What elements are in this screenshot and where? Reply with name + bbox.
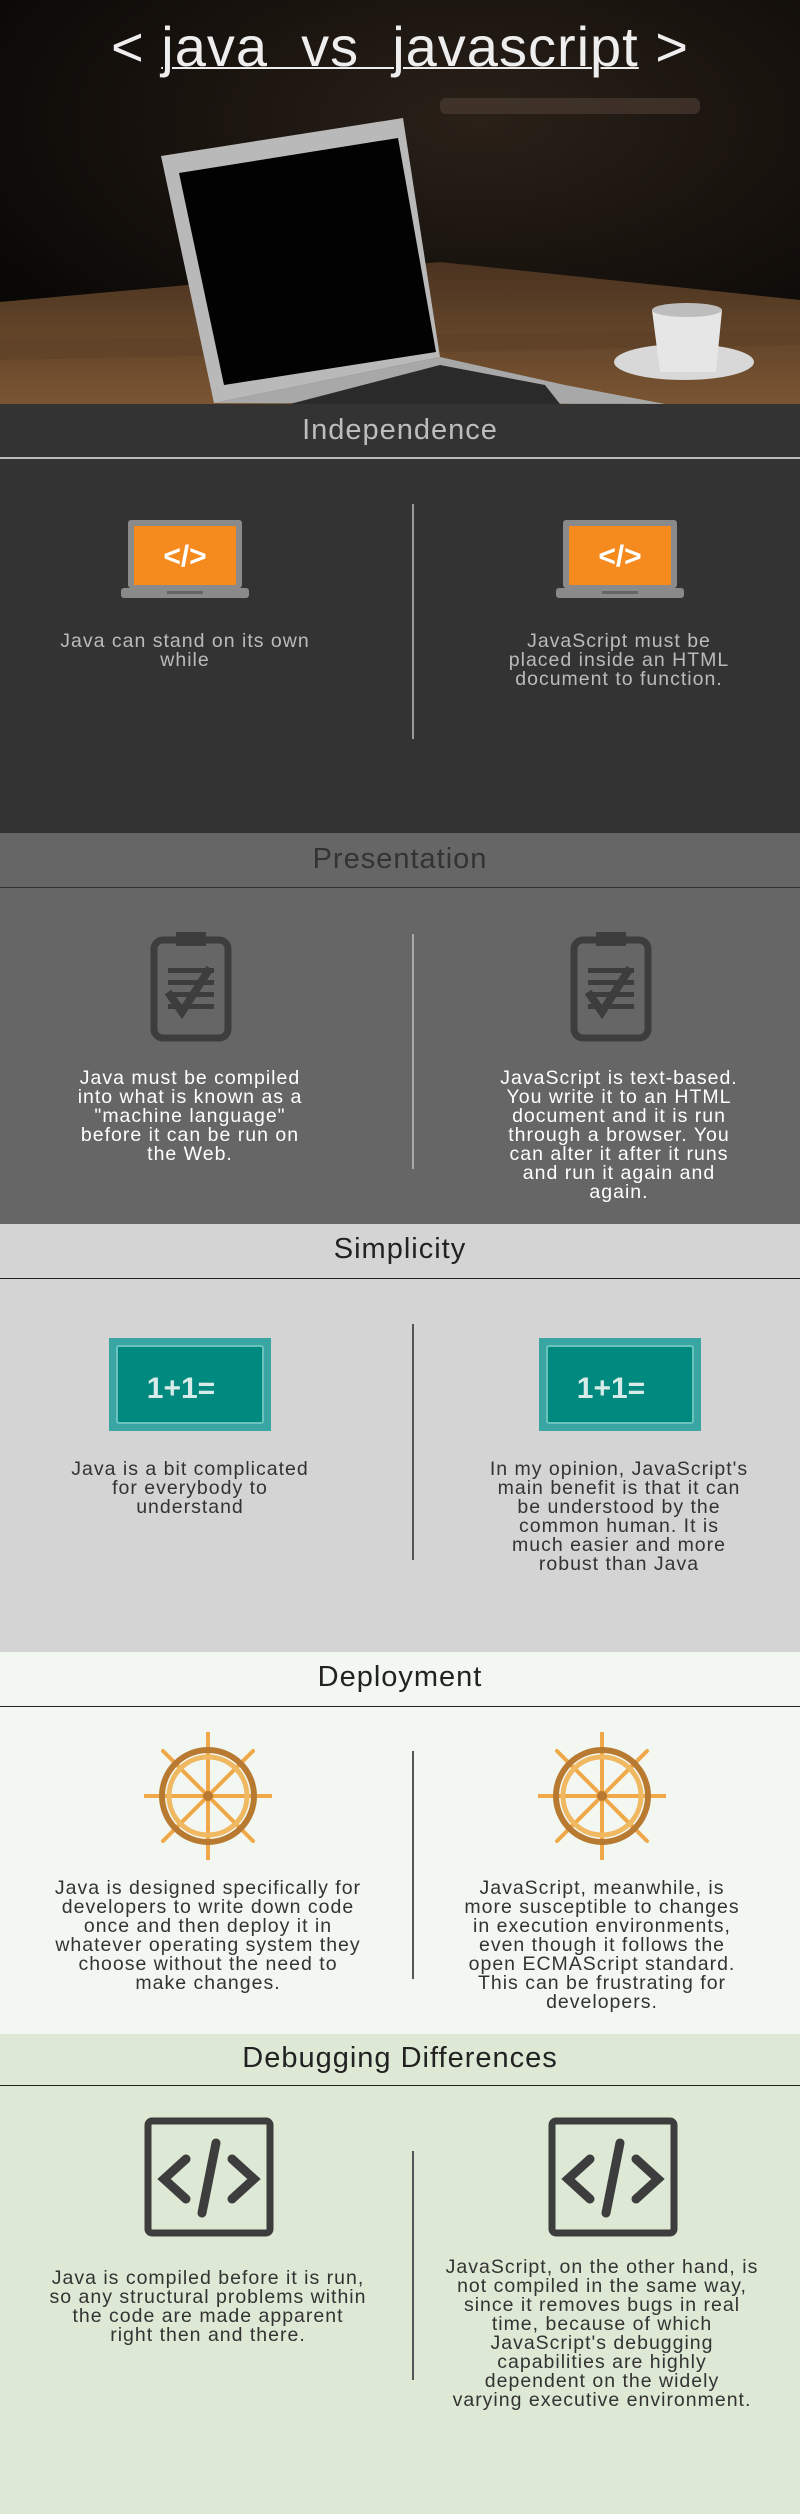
- icon: clipboard left: [150, 932, 232, 1042]
- text: javascript simplicity: robust than Java: [539, 1553, 699, 1575]
- icon: chalkboard right: 1+1=: [577, 1372, 645, 1405]
- text: javascript presentation: document and it is run: [512, 1105, 726, 1127]
- text: javascript debugging: JavaScript's debugging: [490, 2332, 714, 2354]
- text: javascript simplicity: In my opinion, JavaScript's: [490, 1458, 748, 1480]
- heading: Debugging Differences: Debugging Differences: [242, 2042, 558, 2074]
- text: javascript presentation: and run it again and: [523, 1162, 715, 1184]
- icon: ship wheel left: [144, 1732, 272, 1860]
- panel: independence: [0, 404, 800, 833]
- text: javascript deployment: in execution environments,: [473, 1915, 731, 1937]
- icon: chalkboard left: [109, 1338, 271, 1431]
- text: javascript debugging: [446, 2256, 758, 2411]
- icon: laptop code right: </>: [598, 540, 642, 573]
- text: javascript presentation: [500, 1067, 738, 1203]
- text: javascript debugging: capabilities are highly: [497, 2351, 707, 2373]
- panel: debugging differences: [0, 2034, 800, 2514]
- text: javascript debugging: JavaScript, on the other hand, is: [446, 2256, 758, 2278]
- text: java presentation: into what is known as a: [78, 1086, 302, 1108]
- text: java debugging: Java is compiled before it is run,: [52, 2267, 364, 2289]
- cup: [614, 303, 754, 380]
- text: javascript independence: placed inside an HTML: [509, 649, 729, 671]
- text: java presentation: [78, 1067, 302, 1165]
- text: java presentation: Java must be compiled: [80, 1067, 300, 1089]
- text: java debugging: so any structural problems within: [50, 2286, 366, 2308]
- text: javascript presentation: can alter it after it runs: [510, 1143, 728, 1165]
- text: java deployment: whatever operating system they: [55, 1934, 361, 1956]
- text: javascript deployment: even though it follows the: [479, 1934, 725, 1956]
- text: java simplicity: Java is a bit complicated: [71, 1458, 309, 1480]
- heading: Presentation: Presentation: [313, 843, 487, 875]
- text: java simplicity: [71, 1458, 309, 1518]
- heading: Independence: Independence: [302, 414, 498, 446]
- text: javascript deployment: developers.: [546, 1991, 658, 2013]
- text: javascript independence: document to function.: [515, 668, 723, 690]
- text: javascript presentation: again.: [589, 1181, 649, 1203]
- heading: Deployment: Deployment: [318, 1661, 482, 1693]
- text: java debugging: [50, 2267, 366, 2346]
- text: javascript simplicity: much easier and more: [512, 1534, 726, 1556]
- text: javascript independence: [509, 630, 729, 690]
- text: javascript debugging: not compiled in the same way,: [457, 2275, 747, 2297]
- title: < java vs javascript >: [111, 15, 689, 78]
- text: java presentation: before it can be run on: [81, 1124, 299, 1146]
- text: java deployment: choose without the need to: [78, 1953, 338, 1975]
- text: javascript presentation: JavaScript is text-based.: [500, 1067, 738, 1089]
- panel: deployment: [0, 1652, 800, 2034]
- text: javascript debugging: varying executive environment.: [453, 2389, 751, 2411]
- icon: chalkboard right: [539, 1338, 701, 1431]
- text: javascript independence: JavaScript must be: [527, 630, 711, 652]
- text: javascript debugging: since it removes bugs in real: [464, 2294, 740, 2316]
- text: java independence: while: [160, 649, 210, 671]
- text: javascript deployment: more susceptible to changes: [464, 1896, 740, 1918]
- text: javascript deployment: open ECMAScript standard.: [469, 1953, 735, 1975]
- text: java deployment: [55, 1877, 361, 1994]
- icon: clipboard right: [570, 932, 652, 1042]
- panel: simplicity: [0, 1224, 800, 1652]
- text: java debugging: the code are made apparent: [72, 2305, 344, 2327]
- panel: presentation: [0, 833, 800, 1224]
- laptop: [161, 118, 665, 404]
- text: javascript deployment: This can be frustrating for: [478, 1972, 726, 1994]
- text: javascript deployment: [464, 1877, 740, 2013]
- text: java presentation: the Web.: [147, 1143, 233, 1165]
- text: java deployment: developers to write down code: [62, 1896, 354, 1918]
- icon: laptop code right: [556, 520, 684, 598]
- text: java presentation: "machine language": [94, 1105, 286, 1127]
- icon: ship wheel right: [538, 1732, 666, 1860]
- text: javascript deployment: JavaScript, meanwhile, is: [479, 1877, 724, 1899]
- icon: code box right: [548, 2118, 678, 2236]
- text: java independence: Java can stand on its own: [60, 630, 310, 652]
- text: java debugging: right then and there.: [110, 2324, 306, 2346]
- icon: laptop code left: [121, 520, 249, 598]
- text: java deployment: once and then deploy it in: [84, 1915, 332, 1937]
- text: javascript simplicity: common human. It is: [519, 1515, 719, 1537]
- text: java simplicity: for everybody to: [112, 1477, 268, 1499]
- heading: Simplicity: Simplicity: [334, 1233, 466, 1265]
- header photo: [0, 0, 800, 404]
- text: javascript presentation: You write it to an HTML: [507, 1086, 731, 1108]
- icon: chalkboard left: 1+1=: [147, 1372, 215, 1405]
- text: javascript debugging: time, because of which: [492, 2313, 712, 2335]
- text: javascript simplicity: be understood by the: [517, 1496, 721, 1518]
- text: javascript simplicity: [490, 1458, 748, 1575]
- text: javascript simplicity: main benefit is that it can: [498, 1477, 740, 1499]
- text: java deployment: make changes.: [135, 1972, 281, 1994]
- text: javascript debugging: dependent on the widely: [485, 2370, 719, 2392]
- icon: code box left: [144, 2118, 274, 2236]
- text: java simplicity: understand: [136, 1496, 244, 1518]
- icon: laptop code left: </>: [163, 540, 207, 573]
- text: java deployment: Java is designed specifically for: [55, 1877, 361, 1899]
- text: javascript presentation: through a browser. You: [508, 1124, 730, 1146]
- text: java independence: [60, 630, 310, 671]
